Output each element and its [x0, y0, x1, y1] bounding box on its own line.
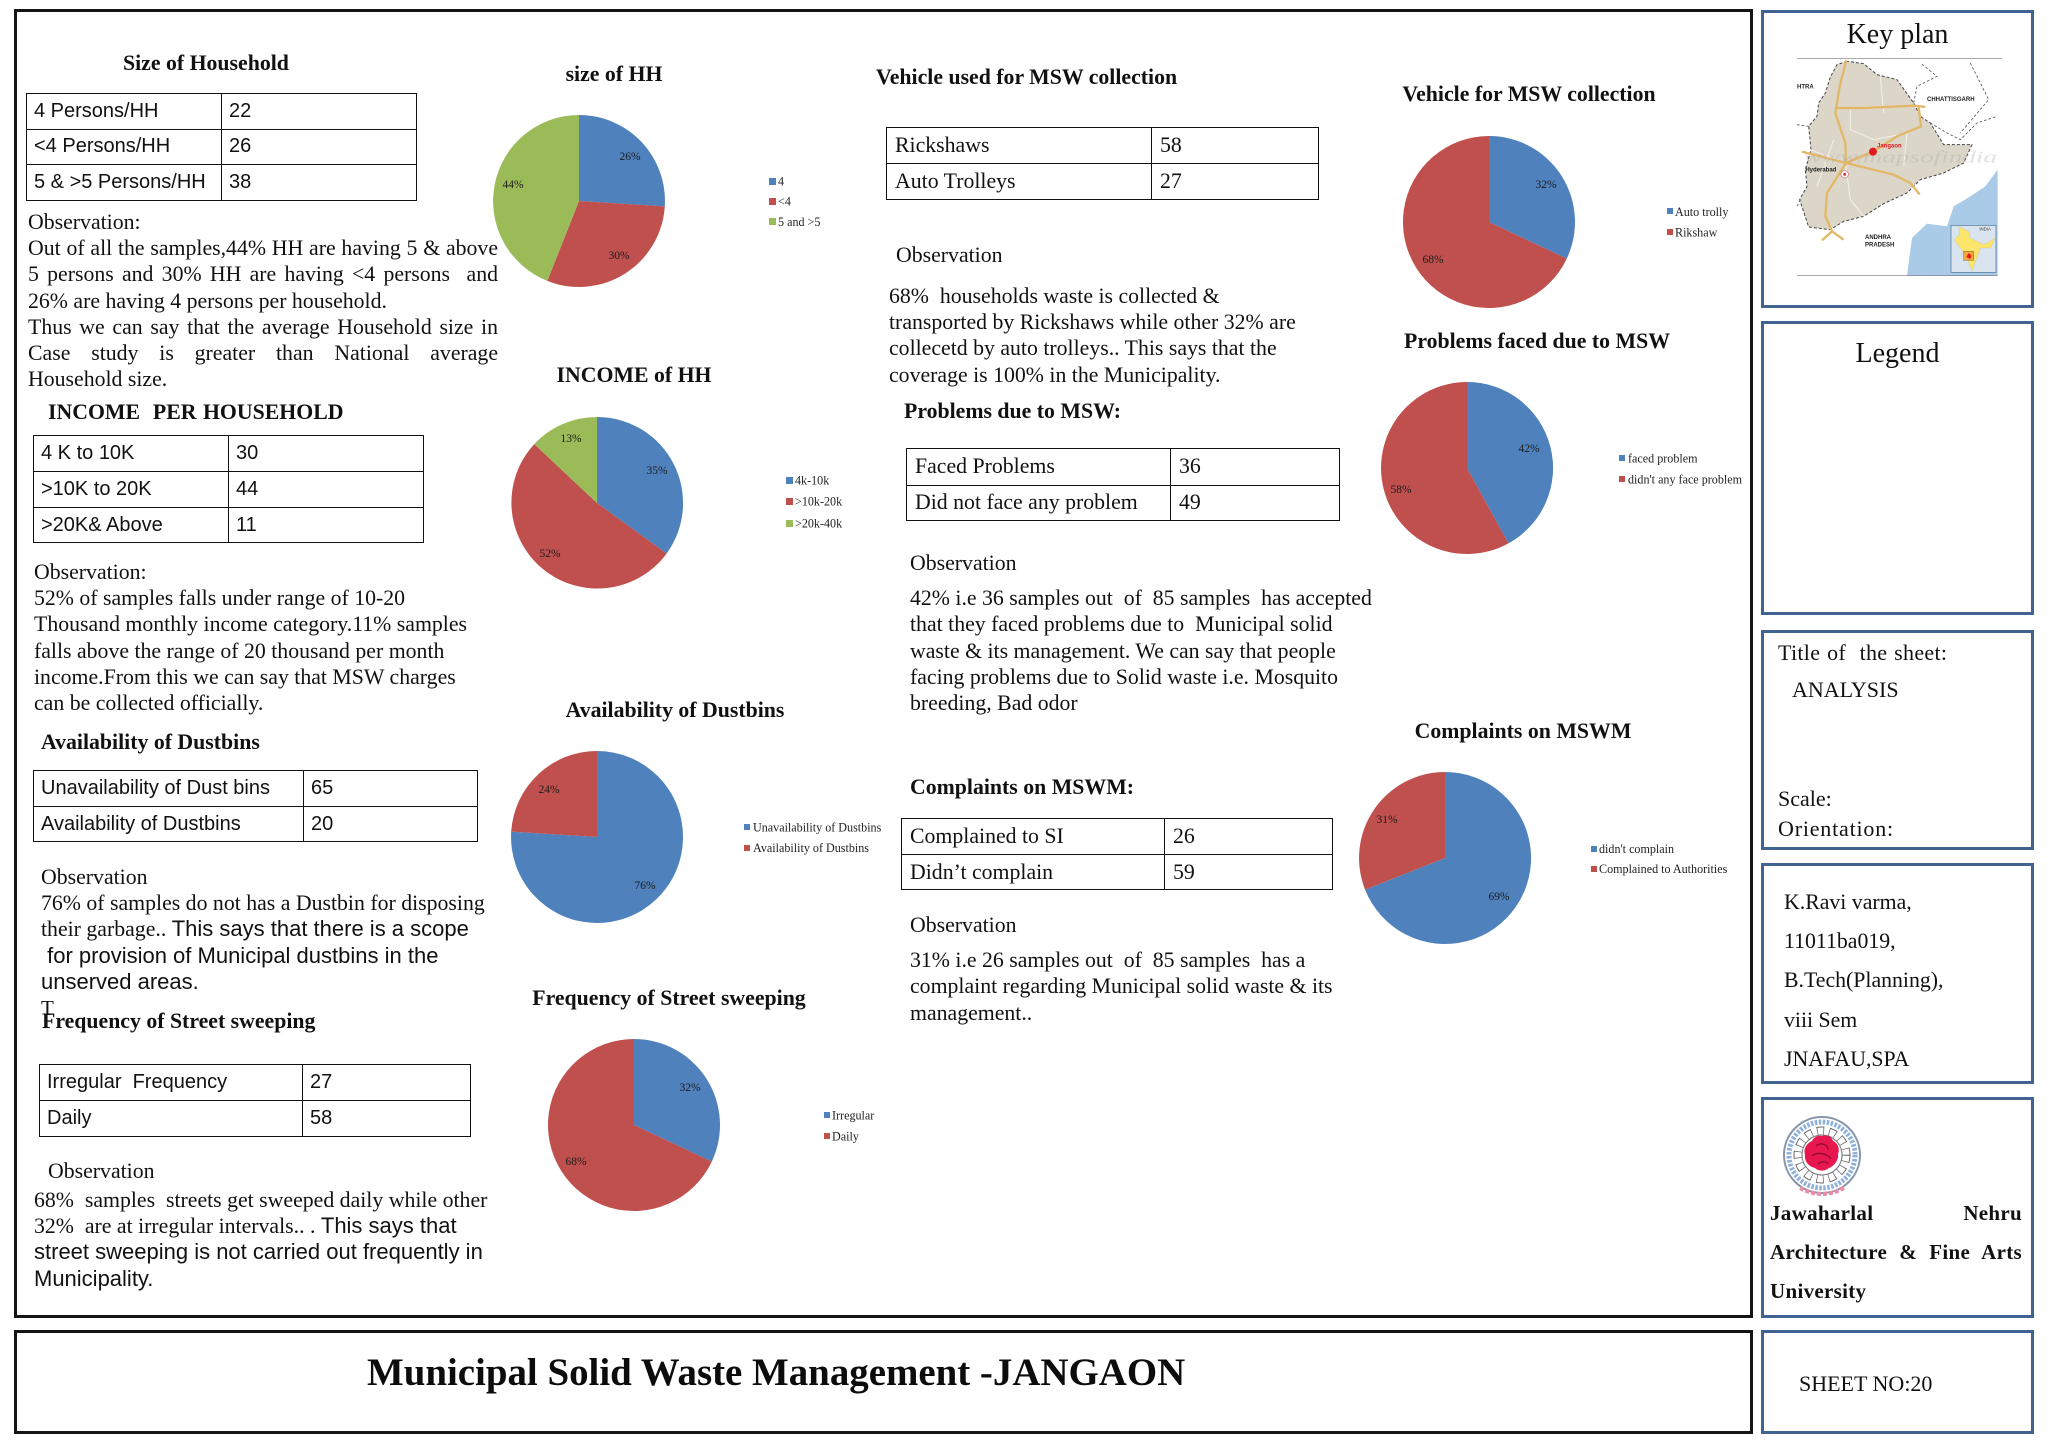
table: size of household: <4 Persons/HH	[34, 135, 170, 157]
heading: vehicle used for MSW collection: Vehicle used for MSW collection	[876, 65, 1177, 89]
observation: street sweeping text: street sweeping is not carried out frequently in	[34, 1239, 483, 1264]
table: complaints on MSWM: 26	[1173, 824, 1195, 848]
observation: problems: that they faced problems due to Municipal solid	[910, 612, 1333, 636]
observation: income: income.From this we can say that MSW charges	[34, 665, 456, 689]
chart title: size of HH: size of HH	[566, 62, 662, 86]
chart title: complaints on MSWM: Complaints on MSWM	[1415, 719, 1631, 743]
legend: Unavailability of Dustbins	[753, 820, 882, 834]
legend heading: Legend	[1856, 338, 1939, 369]
legend: Auto trolly	[1675, 205, 1728, 219]
table: availability of dustbins: 20	[311, 812, 333, 834]
observation: dustbins: their garbage.. This says that there is a scope	[41, 916, 469, 941]
table: vehicle used: 58	[1160, 133, 1182, 157]
observation: street sweeping text: Municipality.	[34, 1266, 153, 1291]
data labels: 13%	[560, 433, 582, 445]
panel: sheet number	[1761, 1330, 2034, 1434]
district lines	[1810, 76, 1907, 216]
legend: <4	[778, 194, 791, 208]
legend	[744, 820, 882, 855]
legend: Daily	[832, 1130, 859, 1144]
sheet name: ANALYSIS	[1792, 677, 1899, 702]
observation: street sweeping label: Observation	[48, 1159, 155, 1183]
chart title: vehicle for MSW collection: Vehicle for MSW collection	[1402, 82, 1656, 106]
data labels: 58%	[1390, 484, 1412, 496]
pie chart: frequency of street sweeping	[548, 1039, 874, 1211]
pie slices	[493, 115, 665, 287]
data labels: 31%	[1376, 814, 1398, 826]
observation: street sweeping text: 32% are at irregular intervals.. . This says that	[34, 1213, 457, 1238]
chart title: income of HH: INCOME of HH	[556, 363, 712, 387]
legend: 4	[778, 174, 784, 188]
legend: didn't any face problem	[1628, 472, 1743, 486]
observation: dustbins	[41, 865, 485, 994]
observation: size of household	[28, 210, 498, 391]
legend: didn't complain	[1599, 842, 1674, 856]
author text: 11011ba019,	[1784, 929, 1896, 953]
table: problems due to MSW: Faced Problems	[915, 454, 1055, 478]
sheet title label: Title of the sheet:	[1778, 640, 1947, 665]
map labels: ANDHRA	[1865, 235, 1892, 241]
table: income per household: 30	[236, 442, 258, 464]
observation: size of household: Observation:	[28, 210, 141, 234]
panel: legend	[1761, 321, 2034, 615]
legend: >10k-20k	[795, 494, 843, 508]
table: size of household: 38	[229, 171, 251, 193]
map labels: Jangaon	[1877, 144, 1902, 150]
sheet number text: SHEET NO:20	[1799, 1371, 1932, 1396]
map labels: HTRA	[1797, 84, 1814, 90]
table: availability of dustbins: 65	[311, 777, 333, 799]
pie chart: vehicle for MSW collection	[1403, 136, 1728, 308]
observation: complaints: Observation	[910, 913, 1017, 937]
data labels	[565, 1082, 701, 1168]
observation: dustbins: for provision of Municipal dustbins in the	[47, 943, 438, 968]
data labels	[1390, 443, 1540, 496]
pie slices	[548, 1039, 720, 1211]
data labels: 44%	[502, 179, 524, 191]
legend	[1667, 205, 1728, 240]
table: vehicle used	[886, 127, 1319, 200]
author text: K.Ravi varma,	[1784, 890, 1912, 914]
table: street sweeping frequency: 27	[310, 1071, 332, 1093]
chart title: problems faced due to MSW: Problems faced due to MSW	[1404, 329, 1670, 353]
observation: vehicle text: transported by Rickshaws while other 32% are	[889, 310, 1296, 334]
legend: faced problem	[1628, 452, 1698, 466]
observation: size of household: Household size.	[28, 367, 167, 391]
observation: size of household: Out of all the samples,44% HH are having 5 & above	[28, 236, 498, 260]
stray letter: T	[41, 996, 54, 1020]
icon: university logo	[1783, 1116, 1861, 1196]
observation: income: Observation:	[34, 560, 147, 584]
data labels: 30%	[608, 250, 630, 262]
observation: dustbins: unserved areas.	[41, 969, 199, 994]
chart title: frequency of street sweeping: Frequency of Street sweeping	[532, 986, 806, 1010]
data labels	[1376, 814, 1510, 903]
table: size of household: 4 Persons/HH	[34, 100, 158, 122]
map	[1797, 58, 2002, 276]
observation: income: 52% of samples falls under range of 10-20	[34, 586, 405, 610]
legend	[769, 174, 820, 229]
table: complaints on MSWM: Complained to SI	[910, 824, 1064, 848]
legend	[786, 474, 843, 530]
inset India map: INDIA	[1979, 226, 1991, 231]
observation: vehicle label: Observation	[896, 243, 1003, 267]
table: problems due to MSW: Did not face any problem	[915, 490, 1138, 514]
observation: problems	[910, 551, 1372, 715]
panel: author details	[1761, 863, 2034, 1084]
pie slices	[1359, 772, 1531, 944]
table: size of household: 22	[229, 100, 251, 122]
author text	[1784, 890, 1944, 1071]
data labels	[538, 784, 656, 892]
table: income per household: 11	[236, 514, 257, 536]
legend: >20k-40k	[795, 516, 843, 530]
data labels	[539, 433, 668, 560]
table: problems due to MSW: 36	[1179, 454, 1201, 478]
table: street sweeping frequency: 58	[310, 1107, 332, 1129]
data labels: 68%	[565, 1156, 587, 1168]
observation: vehicle text	[889, 284, 1296, 387]
observation: income	[34, 560, 467, 715]
map labels: Hyderabad	[1805, 167, 1837, 173]
observation: problems: waste & its management. We can say that people	[910, 639, 1336, 663]
table: availability of dustbins: Availability of Dustbins	[41, 812, 241, 834]
legend: Rikshaw	[1675, 226, 1718, 240]
orientation label: Orientation:	[1778, 816, 1894, 841]
legend	[1619, 452, 1743, 486]
data labels: 32%	[679, 1082, 701, 1094]
data labels: 42%	[1518, 443, 1540, 455]
table: size of household	[26, 93, 417, 200]
table: size of household: 5 & >5 Persons/HH	[34, 171, 206, 193]
sea	[1907, 170, 1998, 276]
neighbouring borders	[1797, 63, 1997, 206]
data labels: 52%	[539, 548, 561, 560]
legend: 5 and >5	[778, 215, 820, 229]
table: size of household: 26	[229, 135, 251, 157]
table: street sweeping frequency: Daily	[47, 1107, 91, 1129]
observation: complaints: complaint regarding Municipal solid waste & its	[910, 974, 1333, 998]
observation: income: can be collected officially.	[34, 691, 263, 715]
sheet title: Municipal Solid Waste Management -JANGAON	[367, 1351, 1185, 1394]
table: problems due to MSW	[906, 448, 1340, 521]
university name: University	[1770, 1279, 1866, 1303]
table: income per household: 4 K to 10K	[41, 442, 134, 464]
data labels: 24%	[538, 784, 560, 796]
table: vehicle used: Rickshaws	[895, 133, 989, 157]
watermark: www.mapsofindia	[1804, 147, 1997, 166]
observation: income: falls above the range of 20 thousand per month	[34, 639, 444, 663]
pie chart: size of HH	[493, 115, 820, 287]
table: availability of dustbins	[33, 770, 478, 842]
table: street sweeping frequency: Irregular Frequency	[47, 1071, 227, 1093]
observation: vehicle text: 68% households waste is collected &	[889, 284, 1220, 308]
pie slices	[1403, 136, 1575, 308]
observation: problems: Observation	[910, 551, 1017, 575]
table: complaints on MSWM: Didn’t complain	[910, 860, 1053, 884]
observation: dustbins: Observation	[41, 865, 148, 889]
observation: vehicle text: collecetd by auto trolleys.. This says that the	[889, 336, 1277, 360]
university name: Architecture & Fine Arts	[1770, 1240, 2022, 1264]
table: income per household: >20K& Above	[41, 514, 163, 536]
observation: complaints: 31% i.e 26 samples out of 85 samples has a	[910, 948, 1305, 972]
observation: dustbins: 76% of samples do not has a Dustbin for disposing	[41, 891, 485, 915]
heading: frequency of street sweeping: Frequency of Street sweeping	[42, 1009, 315, 1033]
data labels: 26%	[619, 151, 641, 163]
observation: problems: facing problems due to Solid waste i.e. Mosquito	[910, 665, 1338, 689]
pie chart: availability of dustbins	[511, 751, 882, 923]
observation: complaints	[910, 913, 1333, 1025]
table: street sweeping frequency	[39, 1064, 471, 1136]
map labels: CHHATTISGARH	[1927, 97, 1975, 103]
data labels: 32%	[1535, 179, 1557, 191]
pie chart: income of HH	[511, 417, 843, 588]
highways	[1802, 60, 1925, 240]
author text: B.Tech(Planning),	[1784, 968, 1944, 992]
legend: 4k-10k	[795, 474, 830, 488]
pie chart: problems faced due to MSW	[1381, 382, 1743, 554]
table: complaints on MSWM	[901, 818, 1333, 890]
legend: Availability of Dustbins	[753, 841, 869, 855]
observation: size of household: 26% are having 4 persons per household.	[28, 289, 387, 313]
table: availability of dustbins: Unavailability of Dust bins	[41, 777, 270, 799]
heading: size of household: Size of Household	[123, 51, 289, 75]
pie slices	[1381, 382, 1553, 554]
table: income per household	[33, 435, 424, 543]
data labels: 35%	[646, 465, 668, 477]
author text: JNAFAU,SPA	[1784, 1047, 1909, 1071]
observation: size of household: 5 persons and 30% HH are having <4 persons and	[28, 262, 498, 286]
heading: income per household: INCOME PER HOUSEHOLD	[48, 400, 343, 424]
observation: complaints: management..	[910, 1001, 1032, 1025]
key plan heading: Key plan	[1847, 19, 1948, 50]
city markers	[1841, 148, 1877, 178]
panel: key plan	[1761, 10, 2034, 308]
panel: university	[1761, 1097, 2034, 1318]
pie slices	[511, 751, 683, 923]
observation: problems: breeding, Bad odor	[910, 691, 1078, 715]
observation: street sweeping text: 68% samples streets get sweeped daily while other	[34, 1188, 487, 1212]
pie chart: complaints on MSWM	[1359, 772, 1728, 944]
pie slices	[511, 417, 683, 589]
observation: income: Thousand monthly income category.11% samples	[34, 612, 467, 636]
table: complaints on MSWM: 59	[1173, 860, 1195, 884]
legend	[824, 1108, 874, 1144]
observation: street sweeping text	[34, 1188, 488, 1291]
heading: complaints on MSWM: Complaints on MSWM:	[910, 775, 1134, 799]
data labels	[1422, 179, 1557, 266]
panel: main analysis frame	[14, 9, 1753, 1318]
heading: problems due to MSW: Problems due to MSW:	[904, 399, 1121, 423]
inset India map	[1951, 225, 1996, 272]
data labels: 68%	[1422, 254, 1444, 266]
university name: Jawaharlal Nehru	[1770, 1201, 2022, 1225]
state of Telangana	[1800, 61, 1972, 230]
table: income per household: >10K to 20K	[41, 478, 152, 500]
data labels	[502, 151, 641, 262]
table: problems due to MSW: 49	[1179, 490, 1201, 514]
data labels: 76%	[634, 880, 656, 892]
data labels: 69%	[1488, 891, 1510, 903]
legend	[1591, 842, 1728, 876]
university name	[1770, 1201, 2022, 1303]
observation: vehicle text: coverage is 100% in the Municipality.	[889, 363, 1221, 387]
table: vehicle used: 27	[1160, 169, 1182, 193]
map labels: PRADESH	[1865, 243, 1894, 249]
observation: size of household: Thus we can say that the average Household size in	[28, 315, 498, 339]
map labels	[1797, 84, 1975, 249]
legend: Irregular	[832, 1108, 874, 1122]
table: income per household: 44	[236, 478, 258, 500]
scale label: Scale:	[1778, 786, 1832, 811]
table: vehicle used: Auto Trolleys	[895, 169, 1016, 193]
chart title: availability of dustbins: Availability of Dustbins	[566, 698, 784, 722]
heading: availability of dustbins: Availability of Dustbins	[41, 730, 260, 754]
observation: size of household: Case study is greater than National average	[28, 341, 498, 365]
panel: title of the sheet	[1761, 630, 2034, 850]
panel: title bar frame	[14, 1330, 1753, 1434]
observation: problems: 42% i.e 36 samples out of 85 samples has accepted	[910, 586, 1372, 610]
plan rules	[1797, 58, 2002, 276]
legend: Complained to Authorities	[1599, 862, 1728, 876]
author text: viii Sem	[1784, 1008, 1857, 1032]
